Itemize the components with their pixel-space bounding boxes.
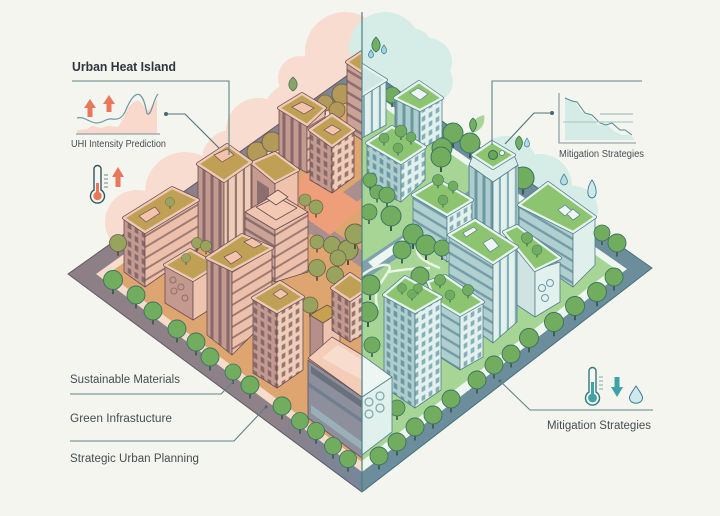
leaf: near tall tower [470,118,476,132]
icon: up arrow one [84,99,96,117]
building: cool front tower [384,277,441,408]
title leader line [72,81,229,155]
sidewalk: warm side [96,85,362,472]
chart trend line [77,94,158,123]
icon: cool water drop [629,386,643,403]
building: rear right tower [310,115,354,193]
trees: cool street [361,147,451,231]
drop: near leader [524,138,530,147]
chart axes [559,93,636,143]
label: green infrastucture: Green Infrastucture [70,413,172,425]
ground: cool half [362,65,652,492]
building: cool wide block [519,183,595,287]
back trees: warm [246,84,347,161]
leaves: right of rear block [471,115,484,133]
paved plaza: warm side [298,172,362,235]
inner street: warm side [311,228,362,268]
sidewalk: cool side [362,85,627,472]
trees: plaza [299,194,365,288]
icon: up arrow two [103,95,115,112]
center divider [361,12,363,492]
leaf: near leader [516,136,522,150]
chart: UHI intensity prediction [76,94,160,134]
building: front window tower [253,282,303,388]
chart: mitigation strategies [559,93,636,143]
chart area [77,100,157,134]
building: front grey block [308,337,362,458]
building: stepped tower [245,190,308,282]
back trees: cool [386,86,535,194]
label: strategic urban planning: Strategic Urban Planning [70,453,199,465]
building: small utility block [303,296,340,356]
drops: top cool side [368,45,387,58]
label: mitigation strategies bottom: Mitigation Strategies [547,420,651,432]
inner street: cool side [362,191,469,278]
icon: cool thermometer [586,368,603,405]
label: sustainable materials: Sustainable Materials [70,374,180,386]
building: cool small rosette block [504,226,560,317]
leaf: top cool side [372,37,380,52]
cooling cloud [349,12,598,234]
trees: park [358,224,450,420]
road: cool side [362,65,652,492]
chart trend line [565,98,632,135]
target line low [563,121,633,123]
building: far tower [347,52,362,140]
building: cool window block [367,125,425,202]
building: cool big block [449,220,517,343]
building: tall left tower [198,145,251,262]
icon: hot up arrow [112,167,124,187]
drop: small [561,174,567,185]
leaf: warm side [289,77,297,91]
building: cool mid block [428,274,483,370]
building: central tall block [207,235,272,355]
target line high [600,113,633,115]
mitigation top line [492,81,642,145]
leader: green infrastucture [70,406,268,441]
building: far tower cool [362,65,386,138]
floating leaves and drops [289,37,596,198]
building: front block cool face [362,355,392,455]
ground: warm half [68,65,362,492]
park paths [362,240,440,310]
chart label: UHI intensity prediction: UHI Intensity Prediction [71,139,166,150]
building: low square [251,151,300,208]
chart area [565,98,634,140]
building: right edge block [332,274,362,342]
building: rear cool tower [395,82,442,150]
street trees: cool edge [370,225,626,470]
building: cool terrace block [413,174,472,262]
warm district [124,52,365,458]
ground plane: cool side [362,92,614,461]
inner street edge: cool side [368,238,406,267]
inner cross street: warm side [308,178,362,236]
leader: chart to tower [164,112,219,148]
chart label: mitigation strategies: Mitigation Strategies [559,149,644,160]
building: wide low block [124,188,198,287]
building: cool tall tower [469,142,518,245]
road: warm side [68,65,362,492]
ground plane: warm side [108,92,362,462]
title: Urban Heat Island [72,60,176,74]
cool district [358,65,595,455]
leader: mitigation chart to tower [505,111,554,144]
heat cloud [105,12,385,254]
chart baseline [76,133,160,135]
building: small green-roof block [165,238,217,320]
icon: hot thermometer [90,166,108,203]
leader: mitigation strategies bottom [498,380,653,410]
icon: cool down arrow [611,377,623,397]
building: rear left tower [279,94,325,173]
street trees: warm edge [104,234,356,472]
drop: large [588,180,596,198]
leader: sustainable materials [70,382,233,394]
